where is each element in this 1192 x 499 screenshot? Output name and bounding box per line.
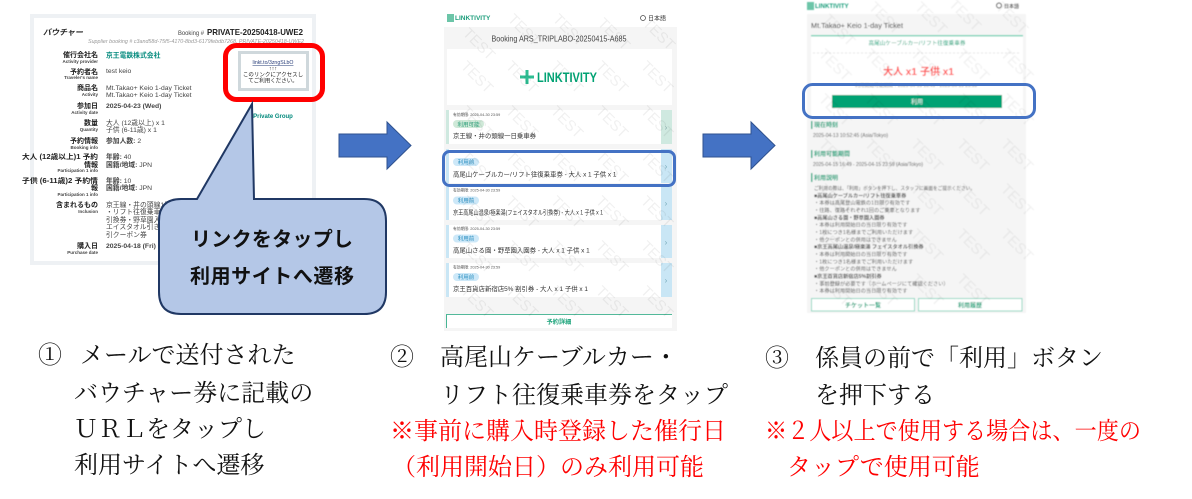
watermark: TEST: TEST	[637, 103, 676, 142]
watermark: TEST: TEST	[457, 58, 496, 97]
watermark: TEST: TEST	[953, 91, 992, 130]
voucher details table: エイスタオル引き換券	[106, 222, 174, 231]
watermark: TEST: TEST	[637, 148, 676, 187]
ticket: Keio Inokashira pass	[446, 110, 672, 144]
step 1 text: ＵＲＬをタップし	[74, 417, 266, 443]
section: usage instructions: ■高尾山さる園・野草園入園券	[814, 214, 885, 222]
step 3 text: 係員の前で「利用」ボタン	[815, 345, 1103, 372]
step 2 text	[390, 344, 728, 481]
voucher details table: Participation 1 info	[57, 168, 98, 173]
section: usage instructions: ■京王高尾山温泉/極楽湯 フェイスタオル引換券	[814, 242, 924, 250]
ticket: observation and garden: ›	[665, 238, 668, 247]
watermark: TEST: TEST	[592, 58, 631, 97]
watermark: TEST: TEST	[907, 226, 946, 265]
watermark: TEST: TEST	[997, 136, 1036, 175]
watermark: TEST: TEST	[815, 91, 854, 130]
panel: booking list screenshot	[444, 11, 678, 331]
watermark: TEST: TEST	[953, 181, 992, 220]
ticket: cable car and lift	[446, 149, 672, 183]
watermark: TEST: TEST	[547, 283, 586, 322]
step 2 text: ※事前に購入時登録した催行日	[390, 418, 726, 445]
watermark: TEST: TEST	[907, 46, 946, 85]
step 1 text: メールで送付された	[80, 342, 296, 369]
voucher details table: 大人 (12歳以上) x 1	[106, 118, 165, 127]
section: current time: 2025-04-13 10:52:45 (Asia/Tokyo)	[813, 133, 888, 139]
voucher details table: 大人 (12歳以上)1 予約	[22, 152, 98, 161]
watermark: TEST: TEST	[502, 58, 541, 97]
ticket list button: チケット一覧	[845, 302, 881, 310]
watermark: TEST: TEST	[547, 148, 586, 187]
language selector	[640, 14, 666, 22]
ticket: observation and garden: 高尾山さる園・野草園入園券 - 大人 x 1 子供 x 1	[453, 246, 590, 254]
ticket: Keio Inokashira pass: 利用可能	[457, 120, 480, 128]
step 3 text: ※２人以上で使用する場合は、一度の	[765, 418, 1141, 445]
ticket: Keio Inokashira pass: 京王線・井の頭線一日乗車券	[453, 131, 537, 140]
link box: ↑↑↑	[269, 66, 277, 72]
watermark: TEST: TEST	[547, 58, 586, 97]
section: usage instructions: ・本券は利用開始日の当日限り有効です	[814, 250, 907, 258]
watermark: TEST: TEST	[953, 226, 992, 265]
watermark: TEST: TEST	[815, 271, 854, 310]
booking heading: Booking ARS_TRIPLABO-20250415-A685	[492, 34, 627, 44]
booking details button: 予約詳細	[547, 318, 571, 326]
ticket: Keio department store coupon	[446, 263, 672, 297]
watermark: TEST: TEST	[861, 181, 900, 220]
voucher details table: 2025-04-18 (Fri)	[106, 243, 156, 250]
step 2 text: （利用開始日）のみ利用可能	[392, 454, 704, 481]
section: usage instructions: 利用説明	[814, 174, 838, 182]
callout: tap the link	[159, 104, 386, 314]
ticket: Keio department store coupon: 京王百貨店新宿店5% 割引券 - 大人 x 1 子供 x 1	[453, 284, 588, 293]
voucher details table: Mt.Takao+ Keio 1-day Ticket	[106, 92, 192, 99]
callout: tap the link: リンクをタップし	[191, 228, 353, 251]
watermark: TEST: TEST	[861, 271, 900, 310]
section: usage instructions: ・本券は利用開始日の当日限り有効です	[814, 220, 907, 228]
step 1 text	[38, 342, 313, 479]
voucher details table: Participation 1 info	[57, 192, 98, 197]
booking details button	[446, 314, 672, 328]
voucher details table: Inclusion	[78, 209, 98, 214]
voucher heading: バウチャー	[43, 28, 84, 37]
voucher details table: Mt.Takao+ Keio 1-day Ticket	[106, 85, 192, 92]
use button	[832, 95, 1002, 108]
watermark: TEST: TEST	[861, 226, 900, 265]
voucher details table: Activity	[82, 92, 98, 97]
voucher details table: 国籍/地域: JPN	[106, 160, 152, 169]
ticket: cable car and lift: 高尾山ケーブルカー/リフト往復乗車券 - 大人 x 1 子供 x 1	[453, 170, 617, 178]
booking number: PRIVATE-20250418-UWE2	[207, 27, 303, 37]
watermark: TEST: TEST	[815, 46, 854, 85]
arrow: step 1 to step 2	[339, 122, 411, 169]
ticket: Keio Inokashira pass: 有効期限: 2025-04-30 23:59	[453, 112, 500, 117]
watermark: TEST	[815, 0, 1036, 310]
watermark: TEST: TEST	[502, 103, 541, 142]
voucher details table: 情報	[84, 160, 98, 169]
watermark: TEST: TEST	[953, 136, 992, 175]
watermark: TEST: TEST	[637, 193, 676, 232]
section: usage instructions: ■京王百貨店新宿店5%割引券	[814, 272, 883, 280]
voucher details table: Purchase date	[67, 250, 98, 255]
watermark: TEST: TEST	[637, 283, 676, 322]
section: usage instructions: ご利用の際は、「利用」ボタンを押下し、スタッフに画面をご提示ください。	[814, 184, 975, 192]
use button: 利用	[911, 98, 923, 106]
ticket: onsen	[446, 186, 672, 220]
section: usage instructions: ・1枚につき1名様までご利用いただけます	[814, 228, 913, 236]
ticket: Keio Inokashira pass: ›	[665, 123, 668, 132]
ticket: onsen: 京王高尾山温泉/極楽湯(フェイスタオル引換券) - 大人 x 1 子供 x 1	[453, 208, 603, 216]
section: usage instructions: ・1枚につき1名様までご利用いただけます	[814, 258, 913, 266]
ticket card: 子供 x1	[920, 65, 954, 78]
voucher details table: 催行会社名	[63, 50, 98, 59]
watermark: TEST: TEST	[861, 46, 900, 85]
watermark: TEST: TEST	[815, 181, 854, 220]
link box: このリンクにアクセスし	[243, 72, 303, 78]
section: usage instructions: ・往路、復路それぞれ1回のご乗車となります	[814, 206, 920, 214]
watermark: TEST: TEST	[907, 91, 946, 130]
voucher details table: 引換券・野草園入園券	[106, 215, 174, 224]
voucher details table: 国籍/地域: JPN	[106, 183, 152, 192]
private group label: Private Group	[253, 114, 293, 120]
watermark: TEST: TEST	[547, 193, 586, 232]
ticket: observation and garden: 有効期限: 2025-04-30 23:59	[453, 226, 500, 231]
watermark: TEST: TEST	[592, 238, 631, 277]
link box: てご利用ください。	[248, 76, 298, 84]
watermark: TEST: TEST	[953, 271, 992, 310]
section: current time: 現在時刻	[814, 121, 838, 129]
small logo: LINKTIVITY	[815, 3, 850, 10]
section: usage instructions: ・事前登録が必要です（ホームページにて確認ください）	[814, 280, 949, 288]
section: usage instructions	[811, 173, 975, 294]
watermark: TEST: TEST	[459, 25, 498, 64]
ticket card: 高尾山ケーブルカー/リフト往復乗車券	[868, 39, 966, 47]
watermark: TEST: TEST	[639, 15, 678, 54]
voucher details table: Traveler's name	[64, 75, 98, 80]
section: valid period	[811, 150, 923, 168]
step 2 text: ②	[390, 344, 414, 371]
ticket: observation and garden: 利用前	[458, 234, 475, 242]
ticket: cable car and lift: ›	[665, 162, 668, 171]
usage history button	[918, 298, 1022, 311]
language selector	[996, 3, 1019, 10]
watermark: TEST: TEST	[457, 148, 496, 187]
red highlight around link	[226, 46, 322, 100]
watermark: TEST: TEST	[997, 226, 1036, 265]
callout: tap the link: 利用サイトへ遷移	[190, 265, 354, 288]
watermark: TEST: TEST	[504, 11, 543, 50]
voucher details table: 年齢: 10	[106, 176, 132, 185]
watermark: TEST: TEST	[953, 46, 992, 85]
watermark: TEST: TEST	[907, 181, 946, 220]
blue highlight around cable car ticket	[444, 152, 674, 186]
voucher details table: 参加日	[77, 101, 98, 110]
voucher details table: ・リフト往復乗車券	[106, 207, 167, 216]
booking number: Booking #	[178, 31, 205, 37]
voucher details table: 参加人数: 2	[106, 136, 141, 145]
watermark: TEST: TEST	[457, 283, 496, 322]
step 3 text: タップで使用可能	[787, 454, 980, 481]
voucher details table: 2025-04-23 (Wed)	[106, 103, 161, 110]
ticket: Keio department store coupon: 利用前	[458, 273, 475, 281]
watermark: TEST: TEST	[637, 238, 676, 277]
arrow: step 2 to step 3	[703, 122, 775, 169]
section: usage instructions: ■高尾山ケーブルカー/リフト往復乗車券	[814, 192, 907, 200]
ticket: Keio department store coupon: ›	[665, 276, 668, 285]
panel: ticket screenshot	[807, 0, 1036, 313]
ticket: Keio department store coupon: 有効期限: 2025-04-30 23:59	[453, 264, 500, 270]
voucher details table: Quantity	[80, 127, 98, 132]
watermark: TEST: TEST	[549, 11, 588, 50]
small logo: LINKTIVITY	[455, 15, 491, 22]
watermark: TEST: TEST	[997, 181, 1036, 220]
step 3 text: を押下する	[815, 382, 935, 409]
supplier booking: Supplier booking # c3and58d-75f5-4170-8bd3-6179febdb7268, PRIVATE-20250418-UWE2	[88, 39, 304, 45]
voucher details table: 報	[91, 183, 98, 192]
ticket: onsen: 利用前	[458, 196, 475, 204]
voucher details table: test keio	[106, 68, 132, 75]
watermark: TEST: TEST	[815, 136, 854, 175]
watermark: TEST: TEST	[547, 238, 586, 277]
ticket card	[811, 35, 1023, 117]
voucher details table: 引クーポン券	[106, 230, 147, 239]
watermark: TEST: TEST	[502, 148, 541, 187]
watermark: TEST: TEST	[907, 271, 946, 310]
watermark: TEST: TEST	[502, 238, 541, 277]
watermark: TEST: TEST	[637, 58, 676, 97]
voucher details table: 子供 (6-11歳) x 1	[106, 125, 157, 134]
voucher details table: 商品名	[77, 83, 98, 92]
blue highlight around use button	[804, 84, 1034, 118]
step 3 text	[765, 345, 1141, 481]
voucher details table: 含まれるもの	[56, 200, 98, 209]
section: usage instructions: ・本券は利用開始日の当日限り有効です	[814, 286, 907, 294]
watermark: TEST	[457, 11, 678, 322]
watermark: TEST: TEST	[502, 193, 541, 232]
small logo	[807, 2, 850, 10]
step 2 text: リフト往復乗車券をタップ	[440, 382, 728, 409]
ticket card: 利用開始可能期間：2025-04-15 16:49 - 2025-04-15 23:59	[855, 82, 978, 89]
voucher details table: 京王電鉄株式会社	[106, 50, 161, 60]
watermark: TEST: TEST	[592, 283, 631, 322]
watermark: TEST: TEST	[997, 91, 1036, 130]
banner logo: LINKTIVITY	[537, 70, 597, 85]
voucher details table: Activity provider	[62, 59, 98, 64]
voucher details table	[22, 50, 192, 255]
watermark: TEST: TEST	[592, 103, 631, 142]
watermark: TEST: TEST	[594, 15, 633, 54]
watermark: TEST: TEST	[457, 193, 496, 232]
watermark: TEST: TEST	[502, 283, 541, 322]
usage history button: 利用履歴	[958, 302, 982, 310]
link box: linkt.to/3zngSLbO	[253, 60, 293, 66]
step 1 text: ①	[38, 342, 62, 369]
section: usage instructions: ・他クーポンとの併用はできません	[814, 264, 897, 272]
ticket: cable car and lift: 利用前	[458, 158, 475, 166]
section: usage instructions: ・他クーポンとの併用はできません	[814, 236, 897, 244]
watermark: TEST: TEST	[907, 136, 946, 175]
watermark: TEST: TEST	[457, 103, 496, 142]
panel: voucher screenshot	[22, 16, 314, 263]
watermark: TEST: TEST	[457, 238, 496, 277]
voucher details table: 購入日	[77, 241, 98, 250]
language selector: 日本語	[648, 14, 666, 22]
voucher details table: 京王線・井の頭線1日乗車券	[106, 200, 192, 209]
step 1 text: 利用サイトへ遷移	[74, 452, 264, 479]
section: usage instructions: ・本券は高尾登山電鉄の1日限り有効です	[814, 198, 910, 206]
ticket: onsen: ›	[665, 199, 668, 208]
ticket title: Mt.Takao+ Keio 1-day Ticket	[811, 21, 904, 30]
ticket card: 大人 x1	[883, 65, 917, 78]
voucher details table: 予約情報	[70, 136, 98, 145]
voucher details table: Activity date	[71, 110, 98, 115]
voucher details table: 予約者名	[70, 67, 98, 76]
voucher details table: 数量	[84, 118, 98, 127]
watermark: TEST: TEST	[819, 11, 858, 50]
voucher details table: 子供 (6-11歳)2 予約情	[22, 176, 98, 185]
ticket list button	[812, 298, 914, 311]
voucher details table: 年齢: 40	[106, 152, 132, 161]
section: valid period: 2025-04-15 16:49 - 2025-04-15 23:59 (Asia/Tokyo)	[813, 162, 923, 168]
step 3 text: ③	[765, 345, 789, 372]
voucher details table: Booking info	[70, 145, 98, 150]
banner logo	[447, 49, 672, 105]
section: valid period: 利用可能期間	[814, 150, 850, 158]
watermark: TEST: TEST	[592, 193, 631, 232]
watermark: TEST: TEST	[861, 136, 900, 175]
ticket: observation and garden	[446, 225, 672, 258]
watermark: TEST: TEST	[815, 226, 854, 265]
watermark: TEST: TEST	[592, 148, 631, 187]
ticket: onsen: 有効期限: 2025-04-30 23:59	[453, 188, 500, 192]
section: current time	[811, 121, 888, 139]
watermark: TEST: TEST	[547, 103, 586, 142]
link box	[240, 52, 308, 90]
watermark: TEST: TEST	[861, 91, 900, 130]
language selector: 日本語	[1004, 3, 1019, 10]
step 1 text: バウチャー券に記載の	[74, 380, 313, 407]
step 2 text: 高尾山ケーブルカー・	[440, 344, 678, 371]
watermark: TEST: TEST	[997, 46, 1036, 85]
